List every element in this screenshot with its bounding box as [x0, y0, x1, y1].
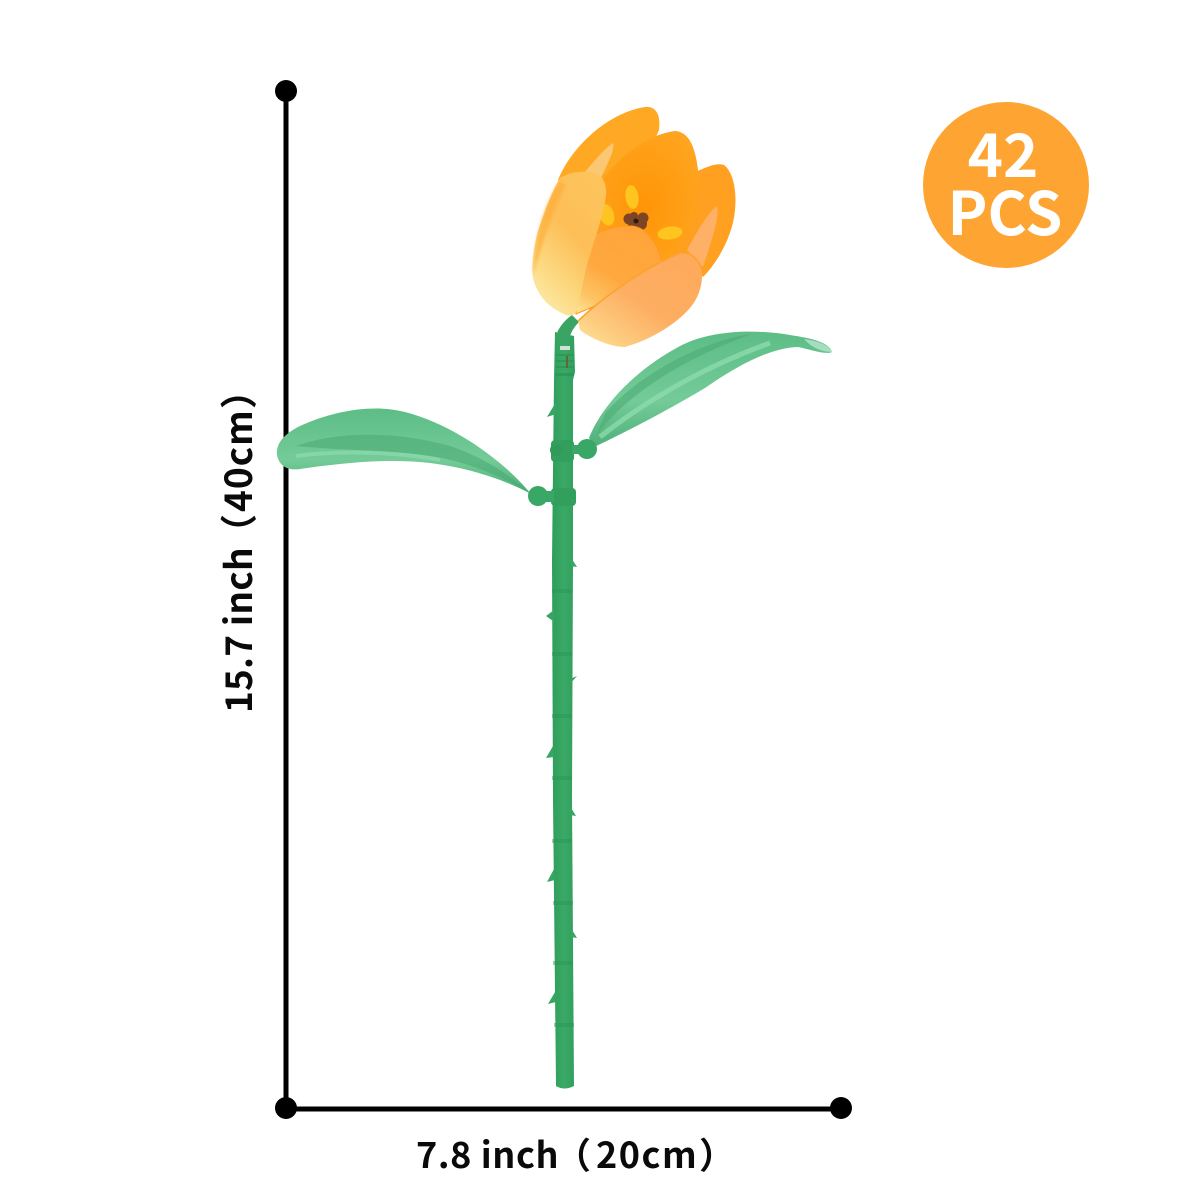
left leaf — [277, 408, 531, 494]
back left petal — [558, 107, 659, 195]
front petal top edge — [578, 253, 701, 321]
front petal — [578, 253, 702, 347]
badge: 42 PCS: 42 — [968, 108, 1038, 195]
badge: 42 PCS — [923, 102, 1089, 268]
orange base fill — [580, 170, 705, 320]
height dimension line — [275, 80, 297, 1108]
width label: 20cm — [596, 1127, 698, 1179]
right leaf — [589, 332, 832, 447]
front centre petal — [576, 226, 662, 314]
tulip plant — [277, 107, 832, 1088]
width label: 7.8 inch — [416, 1127, 559, 1179]
leaf joints — [528, 439, 597, 506]
pistil — [624, 212, 648, 230]
anthers — [597, 184, 683, 241]
width dimension line — [275, 1097, 852, 1119]
back right petal — [680, 164, 736, 277]
height label: 15.7 inch — [209, 547, 263, 713]
left petal edge shade — [533, 180, 566, 275]
width label: ） — [699, 1127, 735, 1179]
right sliver — [687, 206, 718, 267]
left sliver — [585, 143, 613, 185]
width label: （ — [555, 1127, 591, 1179]
height label: （ — [209, 514, 263, 551]
thorns — [546, 402, 577, 1004]
height label: ） — [209, 372, 263, 409]
tulip flower — [532, 107, 736, 347]
stem — [552, 315, 579, 1088]
height label: 40cm — [209, 409, 263, 512]
left front petal — [532, 172, 606, 316]
badge: 42 PCS: PCS — [948, 166, 1062, 253]
centre back petal — [600, 131, 698, 268]
